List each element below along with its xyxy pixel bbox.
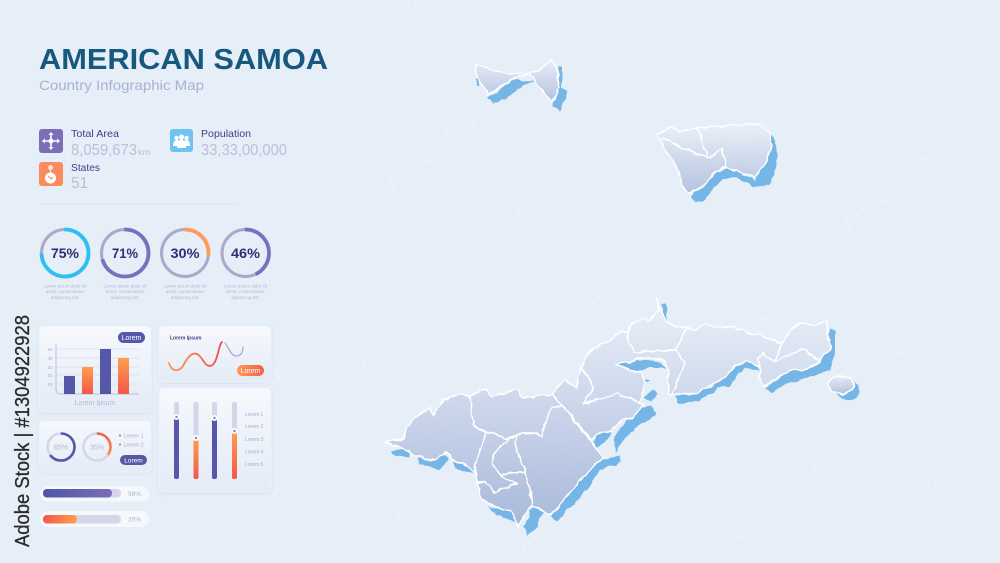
panel: bar chart: 30: [47, 365, 53, 370]
panel: small donuts: Lorem 1: [124, 434, 144, 440]
watermark: Adobe Stock: [506, 116, 625, 222]
map: main island: [385, 297, 860, 536]
panel: bar chart: 50: [47, 347, 53, 352]
donut: 71%: amet, consectetuer: [106, 289, 145, 294]
button: lorem: Lorem: [241, 368, 261, 375]
donut: 30%: [162, 230, 208, 300]
button: lorem: Lorem: [122, 335, 142, 342]
panel: small donuts: [39, 421, 151, 472]
stat: states: 51: [71, 175, 88, 192]
donut: 75%: Lorem ipsum dolor sit: [43, 284, 87, 288]
watermark: Adobe Stock: [551, 236, 670, 342]
donut: 30%: Lorem ipsum dolor sit: [163, 284, 207, 288]
progress bar: 98%: 98%: [128, 491, 141, 498]
panel: sliders: Lorem 2: [245, 424, 264, 430]
stat: total area: [39, 128, 150, 159]
donut: 75%: 75%: [51, 246, 79, 261]
progress bar: 35%: [40, 511, 149, 527]
panel: sliders: Lorem 3: [245, 437, 264, 443]
watermark: Adobe Stock: [216, 216, 335, 322]
panel: small donuts: Lorem 2: [124, 442, 144, 448]
subtitle: Country Infographic Map: [39, 77, 204, 93]
map: north-east island: [657, 124, 777, 203]
watermark: Adobe Stock: [721, 446, 840, 552]
donut: 46%: adipiscing elit.: [231, 295, 260, 300]
stat: total area: 8,059,673: [71, 142, 137, 159]
stat: total area: Total Area: [71, 128, 119, 140]
donut: 75%: adipiscing elit.: [51, 295, 79, 300]
regions: [657, 124, 772, 194]
panel: bar chart: [39, 326, 151, 412]
watermark: Adobe Stock: [386, 421, 505, 527]
donut: 71%: adipiscing elit.: [111, 295, 139, 300]
water: [690, 133, 777, 203]
icon: flag figure: [39, 162, 63, 186]
watermark: Adobe Stock: [56, 61, 175, 167]
progress bar: 35%: 35%: [128, 516, 141, 524]
watermark: Adobe Stock: [381, 91, 500, 197]
icon: arrows: [39, 129, 63, 153]
panel: small donuts: 35%: [90, 444, 104, 452]
button: lorem: Lorem: [124, 457, 143, 464]
panel: sliders: Lorem 4: [245, 450, 264, 456]
stat: population: Population: [201, 128, 251, 140]
watermark: Adobe Stock: [836, 131, 955, 237]
watermark: Adobe Stock: [186, 346, 305, 452]
progress bar: 98%: [40, 486, 149, 502]
islet: [828, 376, 854, 394]
panel: line chart: Lorem Ipsum: [170, 336, 202, 342]
watermark: Adobe Stock: [351, 266, 470, 372]
panel: bar chart: Lorem Ipsum: [75, 400, 116, 407]
watermark: Adobe Stock: [711, 66, 830, 172]
donut: 46%: amet, consectetuer: [226, 289, 265, 294]
panel: small donuts: 65%: [54, 444, 68, 452]
panel: line chart: [159, 326, 271, 382]
watermark: Adobe Stock: [851, 451, 970, 557]
map: north-west island: [475, 59, 567, 112]
panel: bar chart: 10: [47, 382, 53, 387]
panel: bar chart: 20: [47, 373, 53, 378]
bars: [64, 349, 129, 394]
stat: population: [170, 128, 287, 159]
donut: 46%: Lorem ipsum dolor sit: [224, 284, 268, 288]
stat: states: [39, 162, 100, 192]
stock id vertical text: Adobe Stock | #1304922928: [12, 315, 34, 547]
stat: total area: km: [138, 148, 150, 157]
regions: [475, 59, 560, 102]
donut: 46%: [222, 230, 269, 300]
donut: 30%: adipiscing elit.: [171, 295, 199, 300]
panel: bar chart: 40: [47, 356, 53, 361]
icon: people: [170, 129, 193, 152]
water: coastal shallows: [391, 303, 860, 536]
donut: 30%: amet, consectetuer: [166, 289, 205, 294]
regions: [385, 297, 830, 527]
donut: 46%: 46%: [231, 246, 260, 261]
panel: sliders: Lorem 5: [245, 462, 264, 468]
watermark: Adobe Stock: [676, 291, 795, 397]
title: AMERICAN SAMOA: [39, 44, 328, 76]
donut: 75%: amet, consectetuer: [46, 289, 85, 294]
donut: 71%: Lorem ipsum dolor sit: [103, 284, 147, 288]
donut: 71%: [102, 230, 148, 300]
stat: population: 33,33,00,000: [201, 142, 287, 159]
donut: 71%: 71%: [112, 246, 138, 261]
panel: sliders: [159, 388, 271, 492]
stat: states: States: [71, 162, 100, 174]
water: [475, 67, 567, 112]
donut: 30%: 30%: [170, 246, 200, 261]
panel: sliders: Lorem 1: [245, 412, 264, 418]
donut: 75%: [42, 230, 88, 300]
watermark: Adobe Stock: [881, 261, 1000, 367]
watermark: Adobe Stock: [511, 451, 630, 557]
